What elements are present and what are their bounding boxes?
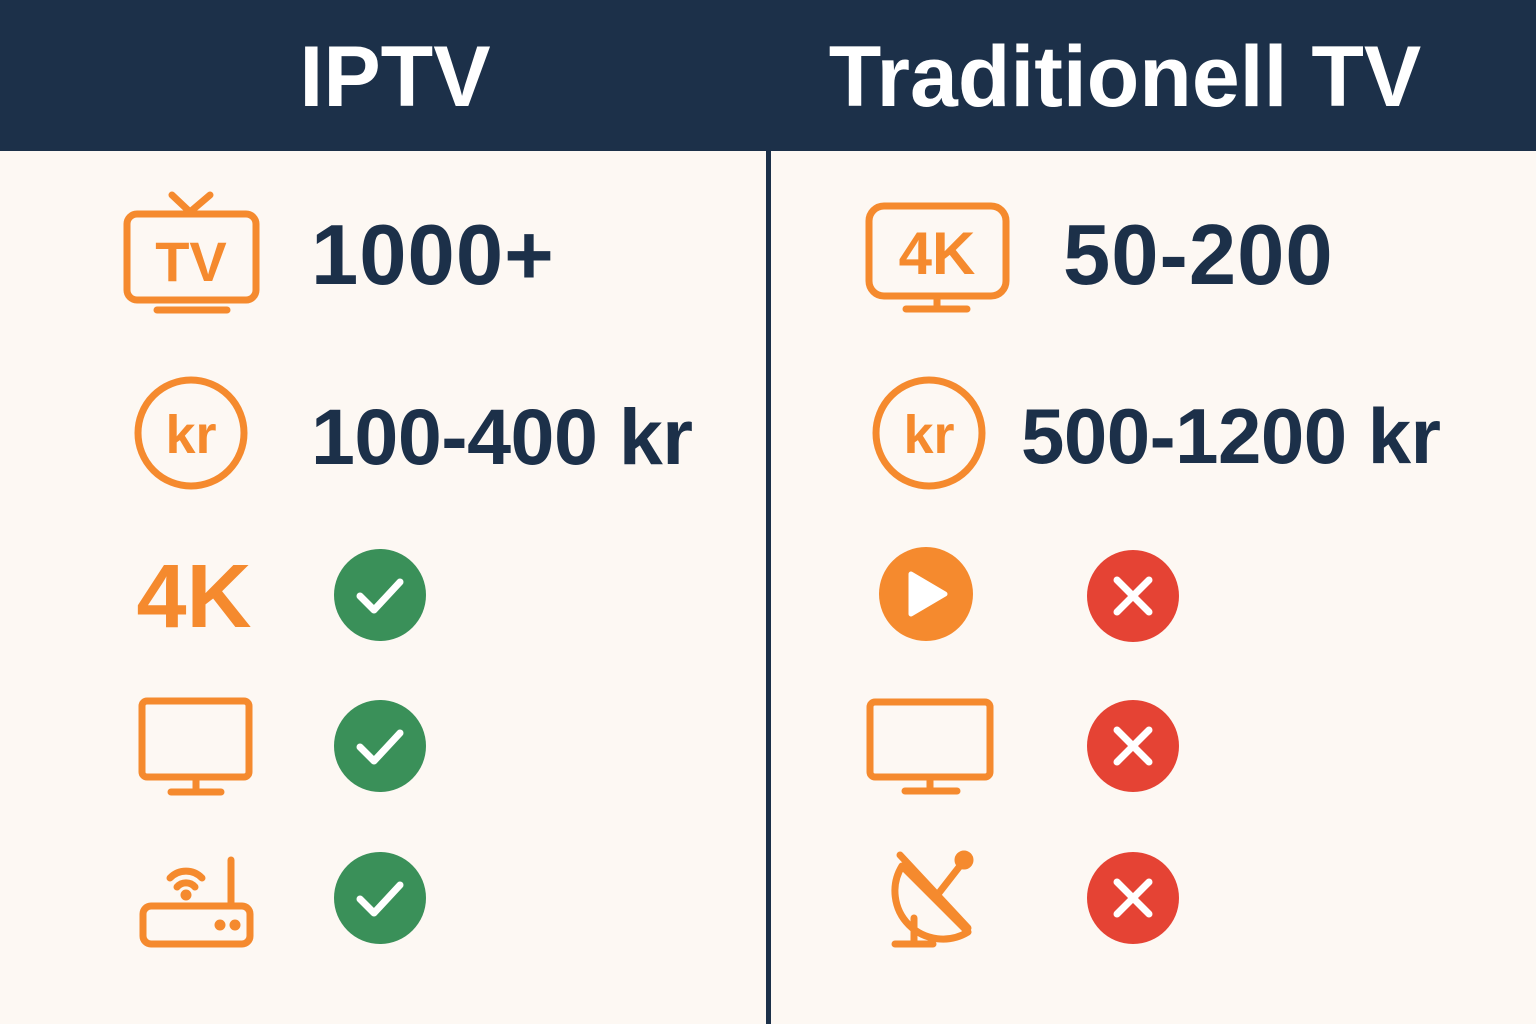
icon: 4K text: 4K — [136, 547, 252, 647]
check icons — [334, 549, 426, 944]
icon: kr coin right — [876, 380, 982, 486]
icon: satellite dish — [895, 854, 970, 944]
icon: tv channels — [127, 195, 256, 310]
icon: 4K monitor — [869, 206, 1006, 309]
value: 50-200: 50-200 — [1063, 208, 1334, 303]
header bar — [0, 0, 1536, 151]
icon: play — [879, 547, 973, 641]
icon: kr coin right: kr — [903, 405, 955, 465]
icon: monitor left — [142, 701, 249, 792]
icon: tv channels: TV — [155, 230, 227, 293]
icon: router — [143, 860, 250, 944]
icon: kr coin left — [138, 380, 244, 486]
divider — [766, 151, 771, 1024]
title: IPTV: IPTV — [299, 29, 491, 125]
icon: 4K monitor: 4K — [899, 220, 975, 287]
value: 1000+: 1000+ — [311, 208, 555, 303]
value: 100-400 kr: 100-400 kr — [311, 392, 693, 481]
cross icons — [1087, 550, 1179, 944]
value: 500-1200 kr: 500-1200 kr — [1021, 392, 1441, 480]
icon: kr coin left: kr — [165, 405, 217, 465]
icon: monitor right — [870, 702, 990, 791]
title: Traditionell TV: Traditionell TV — [829, 29, 1421, 125]
